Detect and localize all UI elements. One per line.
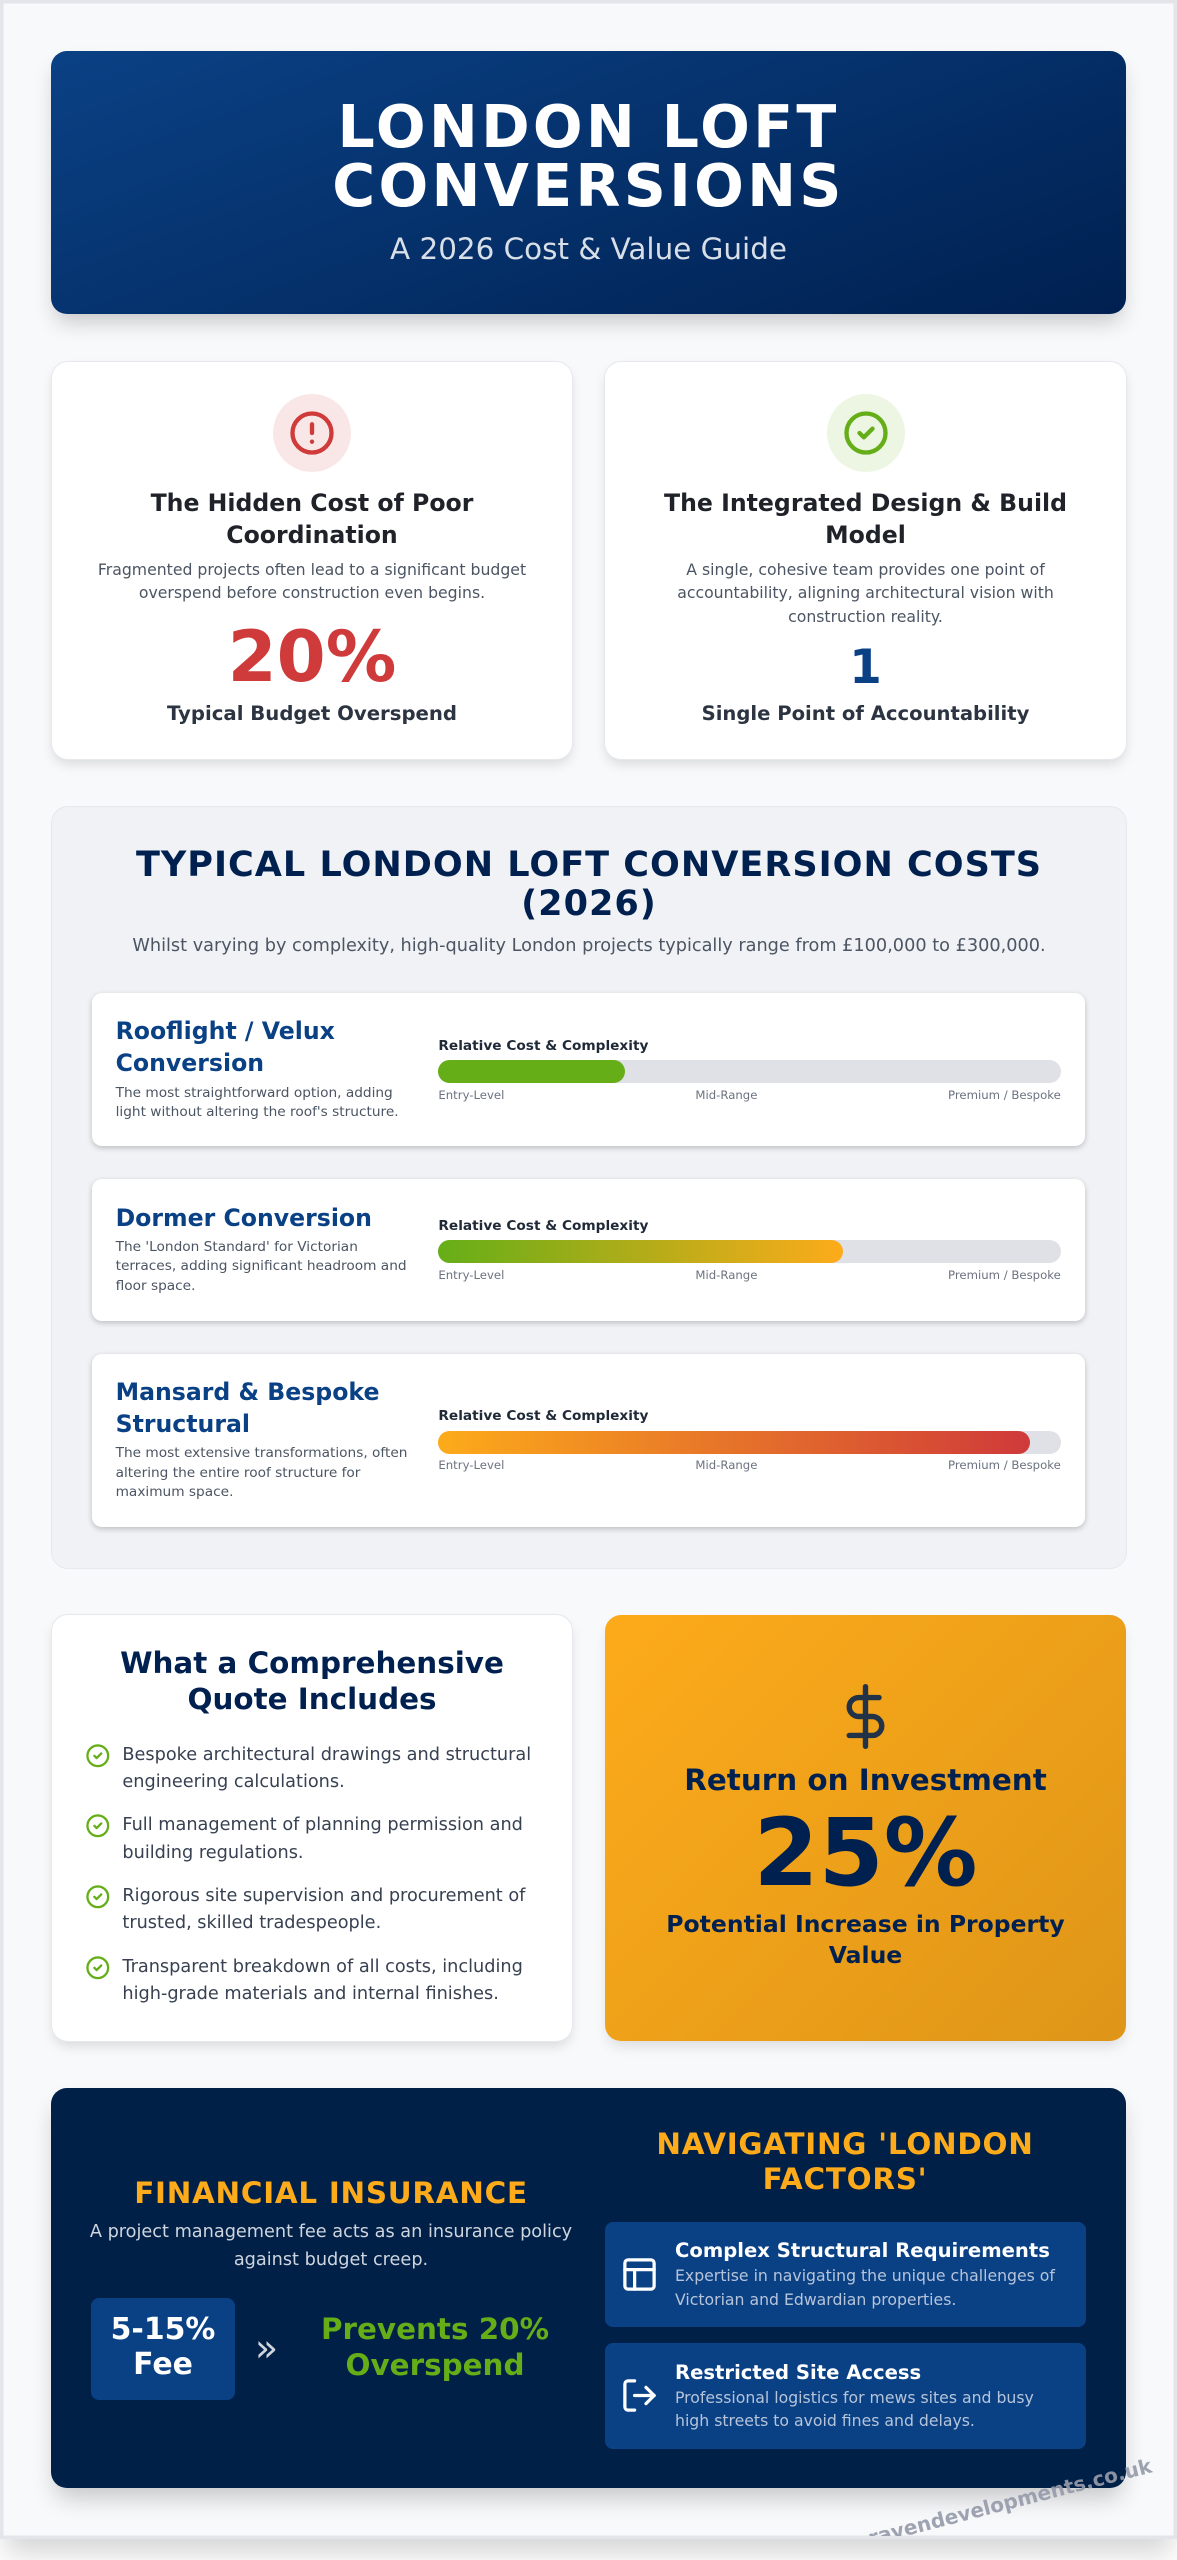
panel heading: What a Comprehensive	[120, 1646, 504, 1680]
cost bar: 95%	[438, 1408, 1061, 1472]
card description: Fragmented projects often lead to a significant budget	[98, 560, 526, 579]
card heading: Model	[825, 520, 906, 548]
panel: typical costs	[52, 807, 1126, 1568]
prevents overspend: Overspend	[346, 2348, 524, 2382]
financial insurance heading: FINANCIAL INSURANCE	[134, 2176, 528, 2210]
arrow: double chevron: »	[255, 2326, 278, 2370]
cost bar: 95%: Entry-Level	[438, 1458, 504, 1472]
cost bar: 65%: Mid-Range	[695, 1268, 757, 1282]
roi heading: Return on Investment	[684, 1762, 1047, 1796]
factor text: Professional logistics for mews sites and busy	[675, 2388, 1034, 2407]
factor heading: Restricted Site Access	[675, 2361, 921, 2384]
checklist item 3: Rigorous site supervision and procurement of	[122, 1886, 525, 1906]
london factors heading: FACTORS'	[763, 2162, 927, 2196]
item description: The 'London Standard' for Victorian	[116, 1239, 358, 1255]
factor: complex structural requirements	[605, 2222, 1086, 2327]
statistic label: Typical Budget Overspend	[167, 702, 457, 725]
roi caption: Value	[829, 1941, 902, 1969]
panel: hidden cost of poor coordination	[52, 362, 572, 759]
title	[332, 93, 845, 220]
statistic label: Single Point of Accountability	[702, 702, 1029, 725]
icon: warning circle	[273, 394, 351, 472]
item heading: Rooflight / Velux	[116, 1017, 335, 1045]
item description: light without altering the roof's structure.	[116, 1104, 399, 1120]
item description	[116, 1445, 407, 1500]
factor: restricted site access	[605, 2343, 1086, 2449]
item heading: Mansard & Bespoke	[116, 1378, 379, 1406]
cost bar: 30%: Mid-Range	[695, 1088, 757, 1102]
section title: (2026)	[521, 883, 657, 924]
cost item: rooflight	[92, 993, 1085, 1146]
item heading: Structural	[116, 1410, 250, 1438]
icon: dollar sign	[846, 1684, 884, 1749]
panel: what a quote includes	[52, 1615, 572, 2041]
card description: overspend before construction even begins.	[139, 583, 485, 602]
item description: terraces, adding significant headroom and	[116, 1258, 407, 1274]
checklist item 1: engineering calculations.	[122, 1772, 345, 1792]
checklist item 3	[86, 1885, 526, 1933]
panel: return on investment	[605, 1615, 1126, 2041]
section subtitle: Whilst varying by complexity, high-quality London projects typically range from £100,000 to £300,000.	[132, 936, 1046, 956]
factor text: Expertise in navigating the unique challenges of	[675, 2266, 1055, 2285]
factor heading: Complex Structural Requirements	[675, 2239, 1050, 2262]
item description: The most straightforward option, adding	[116, 1084, 393, 1100]
checklist item 2	[86, 1814, 523, 1863]
checklist item 2: Full management of planning permission and	[122, 1815, 523, 1835]
item description	[116, 1084, 399, 1120]
cost bar: 30%: Relative Cost & Complexity	[438, 1038, 648, 1054]
title: CONVERSIONS	[332, 152, 845, 220]
subtitle: A 2026 Cost & Value Guide	[390, 232, 787, 266]
card description	[677, 560, 1054, 626]
london factors heading	[656, 2126, 1034, 2196]
factor text: high streets to avoid fines and delays.	[675, 2411, 975, 2430]
prevents overspend: Prevents 20%	[321, 2312, 549, 2346]
icon: layout	[623, 2258, 656, 2291]
card heading: The Integrated Design & Build	[664, 489, 1067, 517]
cost bar: 65%: Premium / Bespoke	[948, 1268, 1061, 1282]
financial insurance text: A project management fee acts as an insurance policy	[90, 2222, 572, 2242]
item heading	[116, 1017, 335, 1077]
icon: exit arrow	[623, 2379, 656, 2412]
panel heading: Quote Includes	[187, 1682, 437, 1716]
card description: A single, cohesive team provides one point of	[686, 560, 1045, 579]
section title	[136, 844, 1042, 924]
panel: financial insurance and london factors	[51, 2088, 1126, 2488]
checklist item 3: trusted, skilled tradespeople.	[122, 1913, 381, 1933]
title: LONDON LOFT	[337, 93, 840, 161]
statistic: 1: 1	[849, 641, 882, 695]
card heading: The Hidden Cost of Poor	[151, 489, 473, 517]
statistic: 20%: 20%	[228, 616, 396, 698]
item description: maximum space.	[116, 1484, 233, 1500]
panel heading	[120, 1646, 504, 1716]
card description	[98, 560, 526, 602]
item description: floor space.	[116, 1278, 195, 1294]
roi caption	[666, 1910, 1065, 1969]
cost bar: 30%: Entry-Level	[438, 1088, 504, 1102]
item description	[116, 1239, 407, 1294]
factor text: Victorian and Edwardian properties.	[675, 2290, 956, 2309]
header banner	[51, 51, 1126, 314]
fee box: Fee	[133, 2347, 193, 2382]
checklist item 4	[86, 1956, 523, 2004]
cost bar: 95%: Mid-Range	[695, 1458, 757, 1472]
cost bar: 65%: Entry-Level	[438, 1268, 504, 1282]
item heading: Dormer Conversion	[116, 1204, 372, 1232]
card heading	[664, 489, 1067, 548]
factor text	[675, 2388, 1034, 2430]
cost item: dormer	[92, 1179, 1085, 1321]
fee box	[91, 2298, 235, 2400]
fee box: 5-15%	[111, 2312, 215, 2347]
cost bar: 95%: Premium / Bespoke	[948, 1458, 1061, 1472]
roi caption: Potential Increase in Property	[666, 1910, 1065, 1938]
checklist	[86, 1744, 531, 2004]
icon: check circle	[826, 394, 904, 472]
cost bar: 95%: Relative Cost & Complexity	[438, 1408, 648, 1424]
card heading: Coordination	[226, 520, 398, 548]
cost bar: 65%	[438, 1218, 1061, 1282]
card heading	[150, 489, 474, 548]
cost bar: 30%: Premium / Bespoke	[948, 1088, 1061, 1102]
financial insurance text: against budget creep.	[234, 2250, 428, 2270]
checklist item 1: Bespoke architectural drawings and structural	[122, 1745, 531, 1765]
cost item: mansard	[92, 1354, 1085, 1527]
checklist item 4: high-grade materials and internal finishes.	[122, 1984, 499, 2004]
checklist item 4: Transparent breakdown of all costs, including	[122, 1957, 523, 1977]
london factors heading: NAVIGATING 'LONDON	[656, 2126, 1034, 2160]
checklist item 1	[86, 1744, 531, 1792]
item heading	[116, 1378, 379, 1438]
cost bar: 65%: Relative Cost & Complexity	[438, 1218, 648, 1234]
factor text	[675, 2266, 1056, 2309]
item heading: Conversion	[116, 1049, 264, 1077]
prevents overspend	[321, 2312, 549, 2382]
financial insurance text	[90, 2222, 572, 2270]
panel: integrated design and build model	[605, 362, 1126, 759]
item description: The most extensive transformations, often	[116, 1445, 407, 1461]
card description: construction reality.	[788, 607, 943, 626]
section title: TYPICAL LONDON LOFT CONVERSION COSTS	[136, 844, 1042, 885]
checklist item 2: building regulations.	[122, 1843, 304, 1863]
cost bar: 30%	[438, 1038, 1061, 1102]
item description: altering the entire roof structure for	[116, 1465, 360, 1481]
card description: accountability, aligning architectural vision with	[677, 583, 1054, 602]
statistic: 25%: 25%	[753, 1799, 978, 1908]
